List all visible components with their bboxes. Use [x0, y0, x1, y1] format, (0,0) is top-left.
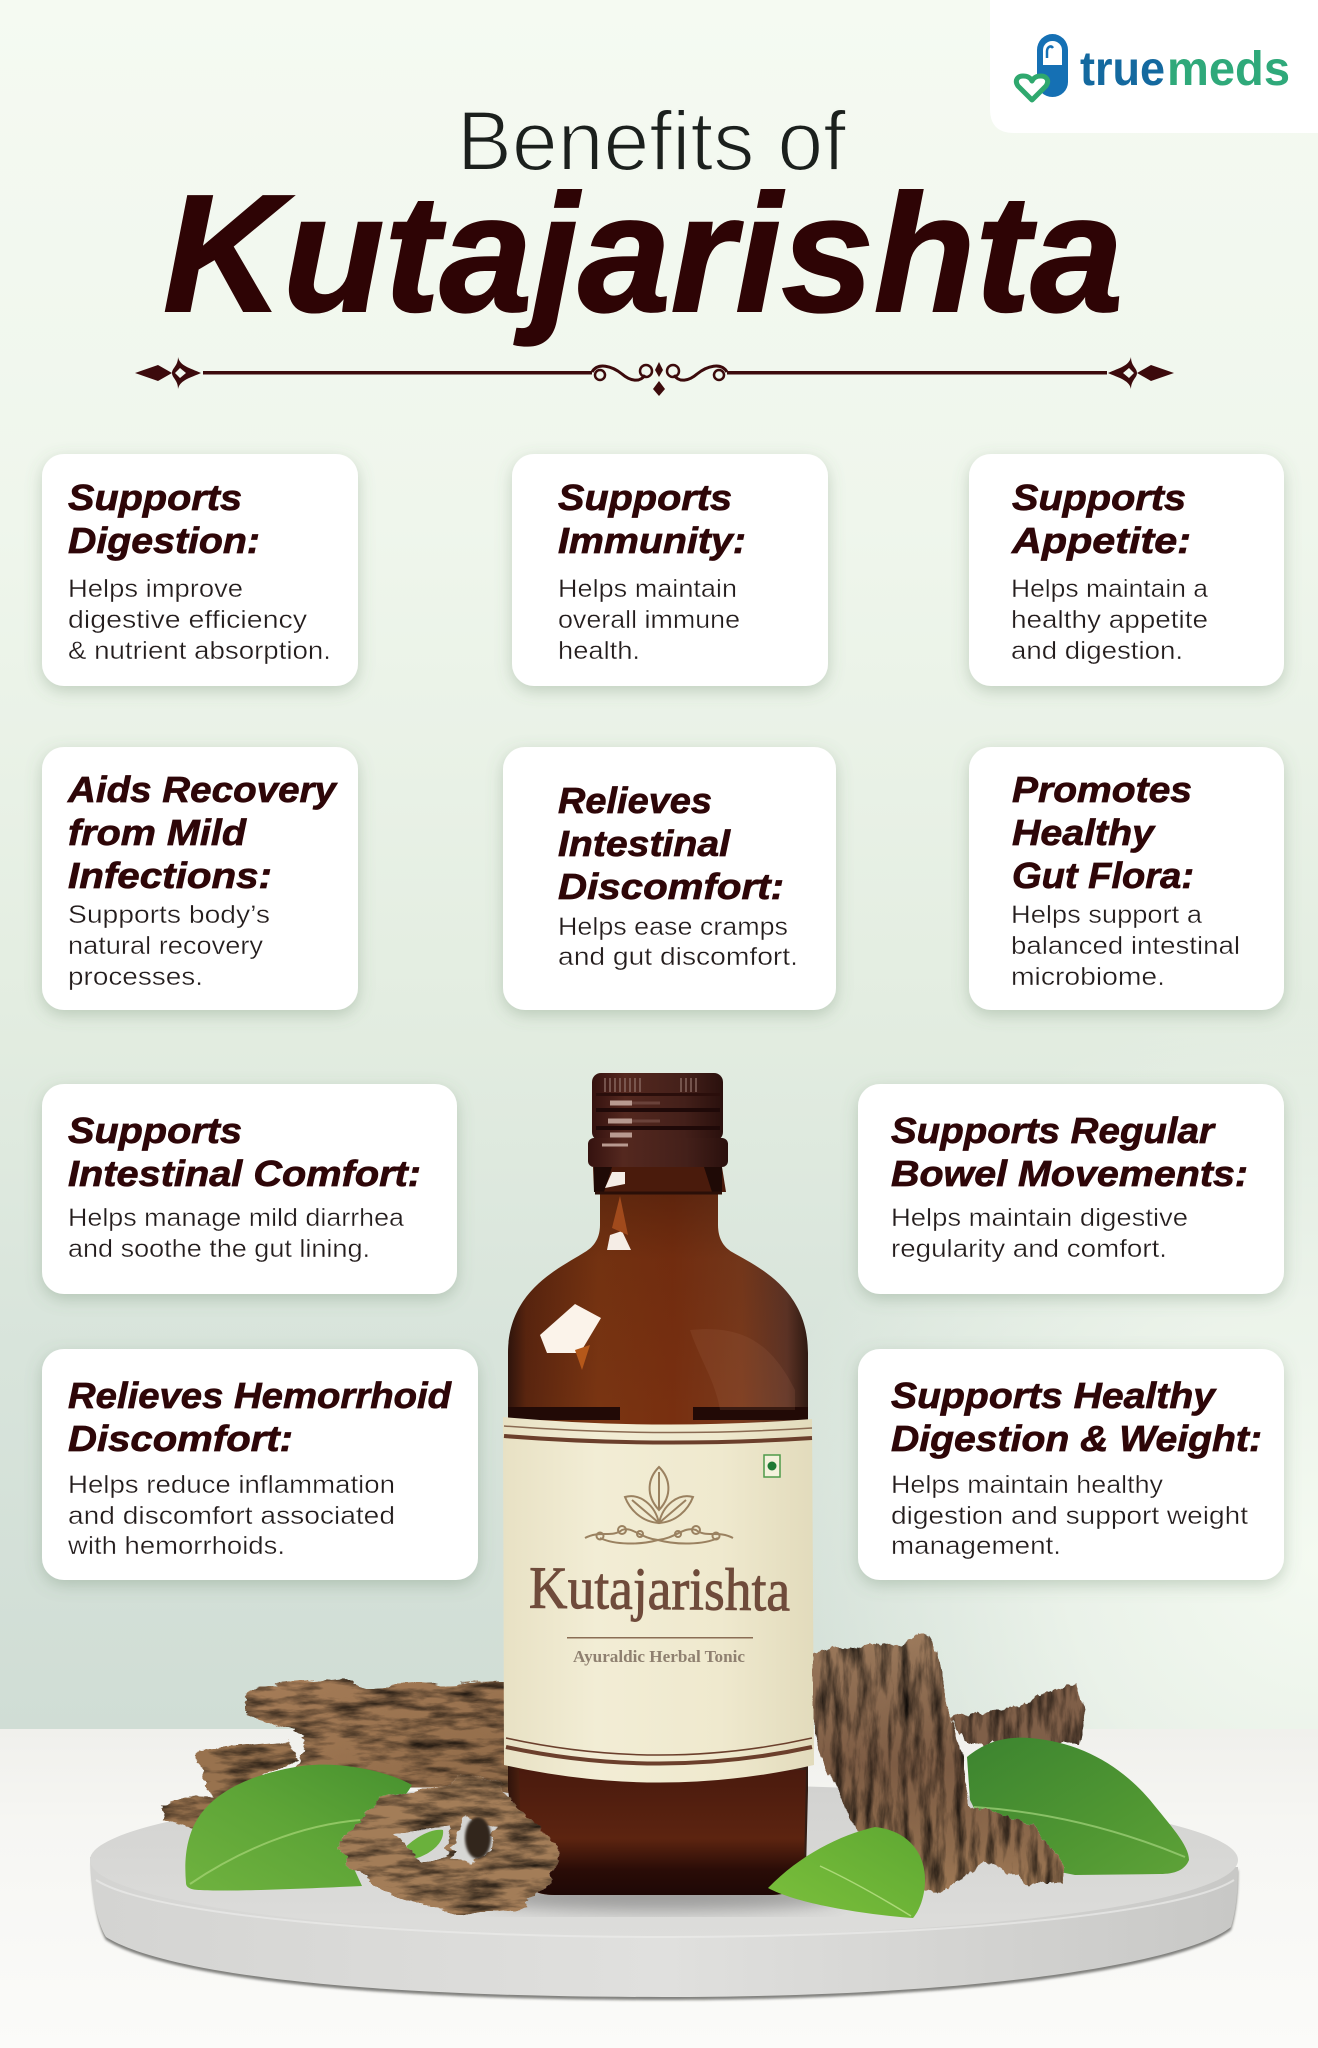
heading	[68, 1375, 452, 1459]
body text: & nutrient absorption.	[68, 637, 331, 665]
heading	[68, 1110, 421, 1194]
heading: Appetite:	[1011, 520, 1191, 561]
body text: Helps support a	[1011, 901, 1202, 929]
heading: Supports Healthy	[891, 1375, 1217, 1416]
heading: Intestinal	[558, 823, 731, 864]
small leaf behind ring	[397, 1830, 443, 1860]
body text: Helps ease cramps	[558, 913, 788, 941]
heading: Promotes	[1012, 769, 1192, 810]
body text	[891, 1204, 1188, 1263]
icon: capsule and heart	[1016, 34, 1068, 100]
title: Benefits of	[457, 94, 847, 188]
heading: Supports	[68, 477, 242, 518]
heading: Bowel Movements:	[891, 1153, 1248, 1194]
heading: Supports Regular	[891, 1110, 1216, 1151]
body text	[67, 1471, 395, 1560]
body text: Helps maintain	[558, 575, 737, 603]
heading: Immunity:	[558, 520, 746, 561]
label product name: Kutajarishta	[529, 1555, 790, 1623]
heading: Supports	[1012, 477, 1186, 518]
panel: relieves hemorrhoid discomfort	[42, 1349, 478, 1580]
label subtitle: Ayuraldic Herbal Tonic	[573, 1647, 745, 1666]
body text: Helps reduce inflammation	[68, 1471, 395, 1499]
panel: supports appetite	[969, 454, 1284, 686]
logo wordmark	[1080, 43, 1290, 96]
icon: leaf emblem	[585, 1467, 733, 1544]
heading	[558, 780, 784, 907]
heading: Relieves Hemorrhoid	[68, 1375, 452, 1416]
heading: Aids Recovery	[67, 769, 338, 810]
body text: Helps improve	[68, 575, 243, 603]
heading	[67, 769, 338, 896]
body text: Helps maintain healthy	[891, 1471, 1164, 1499]
panel: promotes healthy gut flora	[969, 747, 1284, 1010]
body text: Helps maintain digestive	[891, 1204, 1188, 1232]
panel: supports intestinal comfort	[42, 1084, 457, 1294]
body text: management.	[891, 1532, 1061, 1560]
ornamental divider	[135, 357, 1174, 396]
bottle label	[503, 1417, 814, 1782]
stone plate	[90, 1784, 1238, 2000]
body text	[68, 901, 270, 991]
left leaf	[185, 1765, 412, 1891]
body text	[1011, 575, 1208, 665]
heading: Gut Flora:	[1012, 855, 1194, 896]
heading: Healthy	[1012, 812, 1156, 853]
heading	[1012, 769, 1194, 896]
heading	[558, 477, 746, 561]
bark ring	[339, 1775, 561, 1915]
panel: relieves intestinal discomfort	[503, 747, 836, 1010]
heading	[891, 1110, 1248, 1194]
body text	[558, 575, 740, 665]
heading: Digestion & Weight:	[891, 1418, 1262, 1459]
body text	[558, 913, 798, 971]
body text: balanced intestinal	[1011, 932, 1240, 960]
body text: digestion and support weight	[891, 1502, 1248, 1530]
body text	[891, 1471, 1248, 1560]
heading: Infections:	[68, 855, 272, 896]
panel: supports regular bowel movements	[858, 1084, 1284, 1294]
heading: Intestinal Comfort:	[68, 1153, 421, 1194]
right leaf	[967, 1738, 1189, 1875]
body text: regularity and comfort.	[891, 1235, 1167, 1263]
bottle cap	[588, 1073, 728, 1167]
panel: aids recovery	[42, 747, 358, 1010]
heading: Discomfort:	[68, 1418, 293, 1459]
heading: Supports	[68, 1110, 242, 1151]
body text: processes.	[68, 963, 203, 991]
body text: and gut discomfort.	[558, 943, 798, 971]
logo panel	[990, 0, 1318, 133]
bottle body	[508, 1167, 808, 1895]
tall bark piece right of bottle	[814, 1633, 1066, 1893]
body text: and digestion.	[1011, 637, 1183, 665]
heading	[891, 1375, 1262, 1459]
body text: and soothe the gut lining.	[68, 1235, 370, 1263]
panel: supports healthy digestion and weight	[858, 1349, 1284, 1580]
body text	[1011, 901, 1240, 991]
heading	[1011, 477, 1191, 561]
heading	[68, 477, 260, 561]
body text: Helps maintain a	[1011, 575, 1208, 603]
heading: Supports	[558, 477, 732, 518]
heading: Discomfort:	[558, 866, 784, 907]
body text: overall immune	[558, 606, 740, 634]
amber glass bottle	[503, 1073, 814, 1895]
logo wordmark: meds	[1167, 43, 1290, 96]
body text: Helps manage mild diarrhea	[68, 1204, 404, 1232]
body text: with hemorrhoids.	[67, 1532, 285, 1560]
shadow under bottle	[480, 1883, 840, 1911]
panel: supports digestion	[42, 454, 358, 686]
body text	[68, 1204, 404, 1263]
body text: Supports body’s	[68, 901, 270, 929]
body text: and discomfort associated	[68, 1502, 395, 1530]
heading: from Mild	[68, 812, 247, 853]
body text: digestive efficiency	[68, 606, 308, 634]
body text: healthy appetite	[1011, 606, 1208, 634]
body text: natural recovery	[68, 932, 264, 960]
heading: Digestion:	[68, 520, 260, 561]
body text: microbiome.	[1011, 963, 1165, 991]
panel: supports immunity	[512, 454, 828, 686]
heading: Relieves	[558, 780, 712, 821]
logo wordmark: true	[1080, 43, 1165, 96]
front leaf	[768, 1827, 925, 1918]
icon: veg mark	[764, 1455, 780, 1477]
body text	[68, 575, 331, 665]
bark pieces behind bottle	[159, 1678, 1085, 1830]
body text: health.	[558, 637, 640, 665]
title: Kutajarishta	[163, 161, 1123, 347]
